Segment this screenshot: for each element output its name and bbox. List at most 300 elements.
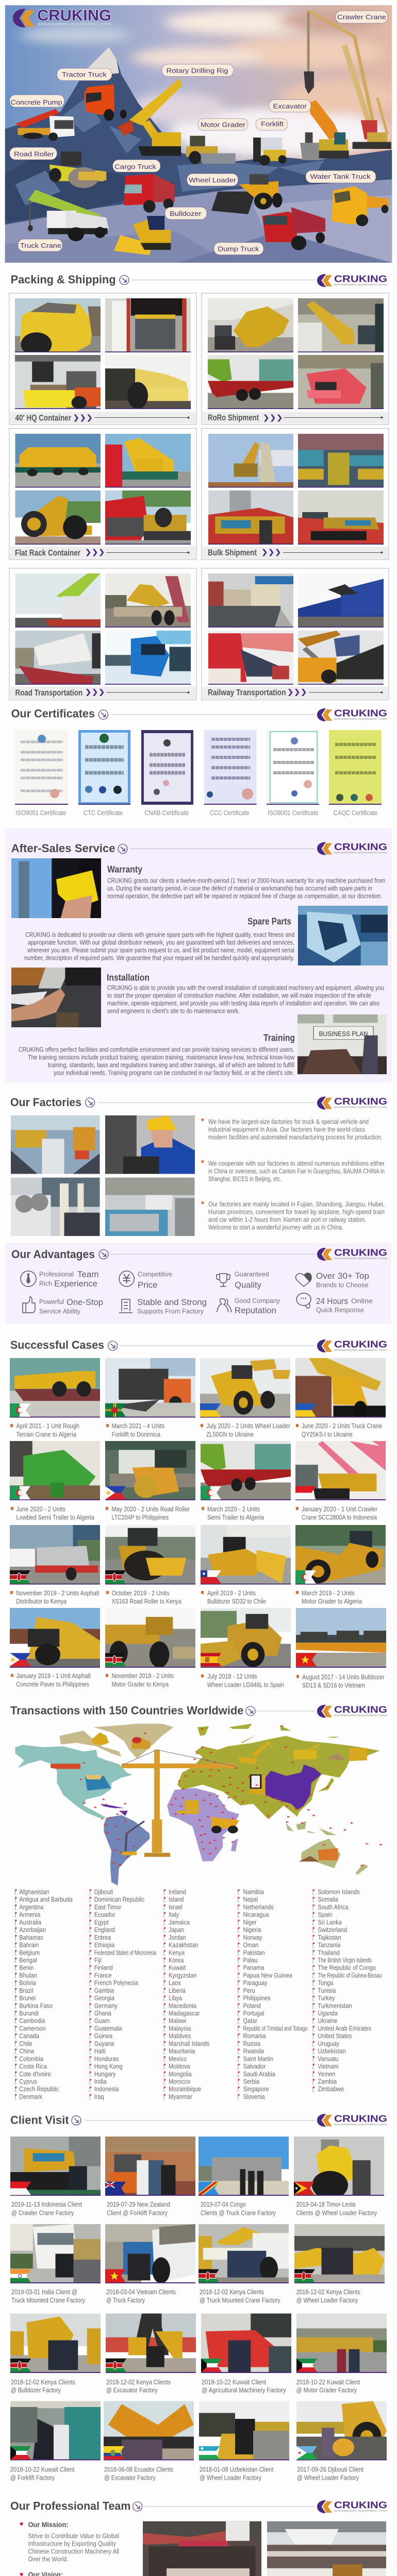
advantage: 24 hours: 24 Hours: [316, 1296, 348, 1306]
country list column 1: Cameroon: [19, 2025, 46, 2032]
photo: forklift lifting roller: [15, 355, 101, 409]
visit caption: Kenya wheel loader: 2018-12-02 Kenya Clients: [296, 2288, 360, 2296]
advantage: brands: Over 30+ Top: [316, 1271, 369, 1281]
country list column 3: Italy: [169, 1911, 179, 1919]
Warranty block: Warranty: [107, 865, 142, 875]
country list column 4: Qatar: [243, 2018, 257, 2025]
visit caption: Kenya truck crane: @ Truck Mounted Crane Factory: [200, 2296, 280, 2304]
country list column 1: Costa Rica: [19, 2063, 47, 2070]
visit: New Zealand: [105, 2137, 195, 2196]
country list column 4: Niger: [243, 1919, 257, 1926]
photo: robot line: [11, 1115, 100, 1174]
bullet 3: and car within 1-2 hours from Xiamen air port or railway station.: [208, 1216, 366, 1223]
country list column 5: Zambia: [318, 2078, 337, 2086]
visit caption: Uzbekistan: @ Wheel Loader Factory: [200, 2474, 261, 2481]
label: Motor Grader: Motor Grader: [201, 121, 246, 129]
country list column 3: Morocco: [169, 2078, 191, 2086]
Spare Parts block: Spare Parts: [247, 916, 291, 926]
photo: roller rear: [15, 298, 101, 352]
label: Bulldozer: Bulldozer: [170, 210, 202, 217]
heading: Packing & Shipping: [11, 273, 388, 287]
visit caption: Kenya excavator: @ Excavator Factory: [106, 2386, 158, 2394]
photo: laptop and hands: [11, 968, 101, 1027]
panel: 40' HQ container: [9, 293, 196, 425]
country list column 2: Egypt: [94, 1919, 109, 1926]
heading: Our Professional Team: Our Professional Team: [10, 2500, 130, 2513]
heading: Transactions with 150 Countries Worldwide: ENGINEERING EQUIPMENT KING: [334, 1714, 388, 1717]
country list column 4: Russia: [243, 2040, 261, 2047]
country list column 2: Hong Kong: [94, 2063, 123, 2070]
visit caption: Vietnam: [106, 2288, 176, 2304]
case caption 15: July 2018 - 12 Units: [207, 1672, 257, 1680]
heading: Transactions with 150 Countries Worldwide: CRUKING: [334, 1704, 387, 1715]
country list column 1: Denmark: [19, 2093, 42, 2100]
country list column 1: Bolivia: [19, 1980, 36, 1987]
section: successful cases: [10, 1338, 388, 1689]
country list column 4: Namibia: [243, 1889, 264, 1896]
country list column 1: Afghanistan: [19, 1889, 49, 1896]
case caption 12: Motor Grader to Algeria: [302, 1597, 362, 1605]
heading: Our Advantages: ENGINEERING EQUIPMENT KING: [334, 1257, 388, 1260]
country list column 4: Oman: [243, 1942, 258, 1949]
case caption 14: November 2018 - 2 Units: [112, 1672, 174, 1680]
certificate: ISO9001 second: ISO9001 Certificate: [268, 809, 318, 817]
photo: crane on flat rack: [15, 434, 101, 487]
visit caption: Indonesia: [11, 2200, 82, 2216]
heading: Our Advantages: Our Advantages: [11, 1248, 95, 1261]
case caption 12: [296, 1589, 362, 1605]
team text: mission: Over the World.: [28, 2555, 68, 2563]
section: advantages: [5, 1243, 391, 1324]
country list column 5: [312, 1888, 382, 2093]
photo: engine: [298, 906, 388, 965]
country list column 5: Vietnam: [318, 2063, 339, 2070]
case: bulldozer: [201, 1525, 291, 1585]
case caption 7: [202, 1505, 264, 1521]
heading: Successful Cases: CRUKING: [334, 1338, 387, 1350]
visit caption: Kenya bulldozer: [11, 2378, 75, 2394]
visit caption: Congo: 2019-07-04 Congo: [201, 2200, 246, 2208]
advantage: 24 hours: Online: [351, 1297, 373, 1304]
advantage: quality: Quality: [235, 1280, 261, 1290]
visit caption: Kuwait grader: [296, 2378, 360, 2394]
country list column 4: Serbia: [243, 2078, 260, 2086]
country list column 3: Madagascar: [169, 2010, 200, 2017]
country list column 5: Uzbekistan: [318, 2048, 346, 2055]
country list column 4: Singapore: [243, 2086, 269, 2093]
country list column 1: [14, 1888, 73, 2100]
advantage: one-stop: Service Ability: [39, 1308, 80, 1315]
advantage: one-stop: [23, 1297, 103, 1315]
case caption 10: October 2019 - 2 Units: [112, 1589, 170, 1597]
heading: Client Visit: [10, 2113, 388, 2127]
case caption 13: January 2019 - 1 Unit Asphalt: [16, 1672, 91, 1680]
country list column 2: Guinea: [94, 2033, 113, 2040]
case caption 11: April 2019 - 2 Units: [207, 1589, 256, 1597]
case: green trailer: [10, 1441, 100, 1500]
country list column 1: Cambodia: [19, 2018, 45, 2025]
caption: Bulk Shipment: [202, 547, 388, 558]
visit caption: Uzbekistan: 2018-01-08 Uzbekistan Client: [200, 2466, 274, 2473]
case caption 6: May 2020 - 2 Units Road Roller: [112, 1505, 190, 1513]
label: Motor Grader: [198, 118, 248, 130]
certificate: CTC: [78, 730, 130, 817]
country list column 2: India: [94, 2078, 107, 2086]
photo: excavator on ship 2: [298, 490, 384, 545]
bullet 1: industrial equipment in Asia. Our factories have the world-class: [208, 1125, 365, 1133]
photo: pink trailers: [298, 355, 384, 409]
country list column 3: Moldova: [169, 2063, 190, 2070]
label: Rotary Drilling Rig: Rotary Drilling Rig: [167, 67, 228, 74]
country list column 3: Laos: [169, 1980, 181, 1987]
country list column 1: Burundi: [19, 2010, 39, 2017]
country list column 5: Turkmenistan: [318, 2003, 352, 2009]
country list column 2: Ecuador: [94, 1911, 115, 1919]
country list column 4: Rwanda: [243, 2048, 264, 2055]
country list column 2: Georgia: [94, 1995, 114, 2002]
visit caption: Vietnam: 2018-03-04 Vietnam Clients: [106, 2288, 176, 2296]
case: padfoot roller: [105, 1525, 195, 1585]
heading: Our Advantages: [11, 1247, 388, 1261]
advantage: reputation: Good Company: [235, 1297, 280, 1304]
visit caption: Djibouti: @ Wheel Loader Factory: [297, 2474, 359, 2481]
Installation block: send engineers to client's site to do maintenance work.: [107, 1008, 240, 1015]
case caption 6: LTC204P to Philippines: [112, 1514, 169, 1521]
country list column 3: Jordan: [169, 1934, 186, 1941]
country list column 2: Guam: [94, 2018, 110, 2025]
certificate: CAQC: CAQC Certificate: [334, 809, 377, 817]
heading: Client Visit: CRUKING: [334, 2113, 387, 2124]
photo: excavator on ship 1: [208, 490, 293, 545]
heading: Transactions with 150 Countries Worldwide: [10, 1704, 388, 1718]
advantage: team: Team: [77, 1269, 99, 1279]
country list column 3: Mozambique: [169, 2086, 201, 2093]
logo: [13, 6, 112, 27]
country list column 2: Gambia: [94, 1987, 114, 1994]
country list column 2: Honduras: [94, 2056, 119, 2063]
caption: Bulk Shipment: Bulk Shipment: [208, 548, 257, 557]
case: asphalt paver: [10, 1608, 100, 1668]
Training block: [19, 1032, 295, 1077]
case: motor grader: [295, 1525, 386, 1585]
visit caption: Kenya truck crane: [200, 2288, 280, 2304]
case caption 1: Terrain Crane to Algeria: [16, 1430, 77, 1438]
heading: After-Sales Service: After-Sales Service: [11, 842, 115, 855]
country list column 5: Switzerland: [318, 1926, 347, 1934]
label: Excavator: Excavator: [273, 102, 307, 110]
visit caption: Timor-Leste: [296, 2200, 377, 2216]
case caption 8: Crane SCC2800A to Indonesia: [302, 1514, 377, 1521]
team text: vision: [20, 2570, 120, 2576]
heading: Our Factories: [10, 1096, 388, 1110]
photo: hold full of excavators: [298, 434, 384, 487]
country list column 1: Bengal: [19, 1957, 37, 1964]
caption: Flat Rack Container: [10, 547, 196, 558]
certificate: CCC: CCC Certificate: [210, 809, 250, 817]
bullet 3: [201, 1200, 385, 1231]
photo: truck crane on trailer: [15, 573, 101, 628]
caption: Railway Transportation: [202, 687, 388, 699]
country list column 3: Macedonia: [169, 2003, 196, 2009]
photo: red low-bed trailer: [208, 355, 293, 409]
case: wheel loaders: [200, 1358, 290, 1418]
Training block: The training sessions include product training, operation training, maintenance know-how, technical know-how: [28, 1054, 295, 1061]
label: Forklift: [256, 118, 288, 130]
bullet 1: We have the largest-size factories for truck & special vehicle and: [208, 1118, 369, 1125]
advantage: brands: Brands to Choose: [316, 1281, 369, 1289]
country list column 5: Spain: [318, 1911, 333, 1919]
country list column 4: Norway: [243, 1934, 262, 1941]
country list column 4: Pakistan: [243, 1950, 265, 1956]
visit caption: New Zealand: 2019-07-29 New Zealand: [107, 2200, 170, 2208]
country list column 3: [163, 1888, 210, 2100]
country list column 2: Iraq: [94, 2093, 104, 2100]
factory bullet list: [201, 1118, 385, 1231]
team text: mission: Strive to Contribute Value to Global: [28, 2532, 119, 2540]
case caption 7: March 2020 - 2 Units: [207, 1505, 260, 1513]
country list column 1: Cote d'Ivoire: [19, 2071, 51, 2078]
country list column 3: Israel: [169, 1904, 183, 1911]
visit caption: Djibouti: 2017-09-26 Djibouti Client: [297, 2466, 363, 2473]
advantage: price: [119, 1270, 172, 1290]
country list column 3: Island: [169, 1896, 184, 1903]
country list column 3: Kenya: [169, 1950, 185, 1956]
country list column 5: Somalia: [318, 1896, 339, 1903]
case caption 2: Forklift to Donimica: [112, 1430, 161, 1438]
bullet 2: [201, 1159, 385, 1183]
team photo: group indoors: [143, 2521, 261, 2576]
country list column 4: Nigeria: [243, 1926, 261, 1934]
label: Crawler Crane: Crawler Crane: [337, 13, 386, 21]
visit caption: Indonesia: @ Crawler Crane Factory: [11, 2209, 74, 2216]
case caption 11: Bulldozer SD32 to Chile: [207, 1597, 266, 1605]
bullet 2: Shanghai, BICES in Beijing, etc.: [208, 1175, 282, 1183]
case caption 5: Lowbed Semi Trailer to Algeria: [16, 1514, 95, 1521]
heading: Successful Cases: ENGINEERING EQUIPMENT KING: [334, 1349, 388, 1351]
case caption 10: XS163 Road Roller to Kenya: [112, 1597, 182, 1605]
case caption 15: Wheel Loader LG946L to Spain: [207, 1681, 284, 1689]
label: Road Roller: Road Roller: [14, 150, 54, 158]
country list column 2: Fiji: [94, 1957, 102, 1964]
Training block: training, standards, laws and regulations training and other trainings, all of which are tailored to fulfill: [48, 1061, 294, 1069]
country list column 2: Haiti: [94, 2048, 106, 2055]
visit caption: Kuwait agricultural: [202, 2378, 286, 2394]
photo: excavator lifted: [208, 434, 293, 487]
country list column 2: Hungary: [94, 2071, 115, 2078]
photo: engine parts: [11, 1178, 100, 1236]
photo: white dump body on truck: [15, 631, 101, 685]
caption: RoRo Shipment: [202, 412, 388, 423]
label: Crawler Crane: [336, 11, 388, 23]
country list column 5: Vanuatu: [318, 2056, 339, 2063]
country list column 2: Ethiopia: [94, 1942, 115, 1949]
bullet 3: Welcome to start a wonderful journey with us in China.: [208, 1223, 343, 1231]
case caption 14: [106, 1672, 174, 1688]
country list column 3: Mexico: [169, 2056, 187, 2063]
case caption 8: January 2020 - 1 Unit Crawler: [302, 1505, 378, 1513]
world map: [15, 1724, 383, 1886]
hero scene: [5, 5, 392, 263]
Training block: your individual needs. Training programs can be conducted in our factory field, or at the client's site.: [54, 1070, 294, 1077]
certificate: ISO9001 second: [267, 730, 319, 817]
country list column 5: The Republic of Guinea-Bissau: [318, 1972, 382, 1979]
country list column 4: Portugal: [243, 2010, 264, 2017]
advantage: price: Competitive: [138, 1270, 172, 1278]
country list column 2: East Timor: [94, 1904, 121, 1911]
country list column 1: China: [19, 2048, 34, 2055]
case caption 9: [10, 1589, 100, 1605]
heading: Client Visit: ENGINEERING EQUIPMENT KING: [334, 2123, 388, 2126]
visit caption: Timor-Leste: Clients @ Wheel Loader Factory: [296, 2209, 377, 2216]
heading: Our Certificates: Our Certificates: [11, 707, 95, 720]
country list column 5: Turkey: [318, 1995, 335, 2002]
section: factories: [10, 1096, 388, 1236]
advantage: quality: Guaranteed: [235, 1270, 269, 1278]
photo: blue containers: [298, 579, 384, 628]
country list column 5: Solomon Islands: [318, 1889, 360, 1896]
case: semi trailer: [201, 1441, 291, 1500]
label: Water Tank Truck: [306, 171, 376, 183]
case: crawler crane: [295, 1441, 386, 1500]
photo: reach stacker loading wagon: [298, 631, 384, 685]
case caption 11: [201, 1589, 266, 1605]
visit caption: Kuwait grader: 2018-10-22 Kuwait Client: [296, 2378, 360, 2386]
caption: 40' HQ Container: 40′ HQ Container: [15, 413, 71, 422]
visit: Kuwait forklift: [10, 2401, 101, 2461]
country list column 1: Australia: [19, 1919, 41, 1926]
country list column 5: United Arab Emirates: [318, 2025, 371, 2032]
label: Forklift: Forklift: [261, 120, 284, 128]
advantage: 24 hours: [296, 1293, 373, 1314]
advantage: team: Professional: [39, 1270, 74, 1278]
label: Dump Truck: Dump Truck: [218, 245, 259, 252]
case caption 4: QY25K5-I to Ukraine: [302, 1430, 353, 1438]
country list column 2: Dominican Republic: [94, 1896, 145, 1903]
photo: roller on low bed: [15, 490, 101, 545]
team text: mission: Our Mission:: [28, 2520, 68, 2529]
heading: After-Sales Service: CRUKING: [334, 841, 387, 852]
visit caption: Kenya bulldozer: 2018-12-02 Kenya Clients: [11, 2378, 75, 2386]
country list column 4: Paraguay: [243, 1980, 268, 1987]
country list column 5: Tonga: [318, 1980, 334, 1987]
panel: railway transportation: [202, 568, 389, 700]
country list column 5: United States: [318, 2033, 352, 2040]
country list column 3: Libya: [169, 1995, 183, 2002]
panel: flat rack container: [9, 429, 196, 560]
visit: Congo: [197, 2137, 289, 2197]
country list column 1: Colombia: [19, 2056, 43, 2063]
country list column 2: Finland: [94, 1964, 113, 1972]
case: bulldozer fleet: [296, 1608, 386, 1668]
country list column 1: Chile: [19, 2040, 32, 2047]
case caption 6: [106, 1505, 190, 1521]
case: road roller: [105, 1441, 195, 1500]
heading: Our Factories: CRUKING: [334, 1096, 387, 1107]
country list column 1: Brunei: [19, 1995, 36, 2002]
case caption 7: Semi Trailer to Algeria: [207, 1514, 264, 1521]
visit caption: Kuwait agricultural: 2018-10-22 Kuwait Client: [202, 2378, 266, 2386]
country list column 2: Indonesia: [94, 2086, 119, 2093]
visit: Ecuador: [104, 2401, 194, 2461]
logo: CRUKING: [37, 6, 111, 24]
country list column 4: Nepal: [243, 1896, 258, 1903]
country list column 5: The Republic of Congo: [318, 1964, 376, 1972]
country list column 4: Romania: [243, 2033, 266, 2040]
photo: roller at container door: [105, 355, 191, 409]
country list column 4: Republic of Trinidad and Tobago: [243, 2025, 308, 2032]
country list column 5: Ukraine: [318, 2018, 338, 2025]
country list column 4: Salvador: [243, 2063, 266, 2070]
visit caption: Indonesia: 2019-11-13 Indonesia Client: [11, 2200, 82, 2208]
team photo: table: [267, 2521, 386, 2576]
Training block: Training: [263, 1032, 295, 1043]
Warranty block: [107, 865, 385, 900]
visit caption: Kuwait grader: @ Motor Grader Factory: [296, 2386, 357, 2394]
country list column 1: Benin: [19, 1964, 34, 1972]
country list column 2: Guatemala: [94, 2025, 122, 2032]
case caption 2: March 2021 - 4 Units: [112, 1422, 164, 1430]
heading: Successful Cases: [10, 1338, 388, 1352]
country list column 4: Saudi Arabia: [243, 2071, 275, 2078]
panel background: [5, 828, 392, 1082]
section: client visit: [10, 2113, 388, 2481]
country list column 3: Liberia: [169, 1987, 186, 1994]
case: graders: [105, 1608, 195, 1668]
country list column 1: Bahrain: [19, 1942, 39, 1949]
Spare Parts block: CRUKING is dedicated to provide our clients with genuine spare parts with the highest quality, exact fitness and: [25, 931, 294, 939]
section: transactions worldwide: [10, 1704, 388, 2100]
certificate: ISO9001: ISO9001 Certificate: [15, 809, 67, 817]
country list column 4: Palau: [243, 1957, 258, 1964]
heading: Our Professional Team: CRUKING: [334, 2500, 387, 2510]
case: wheel loader to Spain: [201, 1608, 291, 1668]
photo: hard hat: [11, 858, 101, 918]
case caption 13: Concrete Paver to Philippines: [16, 1681, 89, 1688]
country list column 5: Tunisia: [318, 1987, 336, 1994]
country list column 3: Mauritania: [169, 2048, 195, 2055]
Spare Parts block: [24, 916, 294, 961]
country list column 5: Uganda: [318, 2010, 338, 2017]
label: Cargo Truck: Cargo Truck: [114, 163, 157, 171]
advantage: team: Rich: [39, 1280, 52, 1287]
country list column 1: Armenia: [19, 1911, 41, 1919]
case caption 14: Motor Grader to Kenya: [112, 1681, 169, 1688]
country list column 4: Poland: [243, 2003, 261, 2009]
advantage: 24 hours: Quick Response: [316, 1306, 364, 1314]
case: rough terrain crane: [10, 1358, 100, 1418]
advantage: stable support: [119, 1297, 207, 1315]
visit caption: India: 2019-03-01 India Client @: [11, 2288, 77, 2296]
section: packing and shipping: [9, 273, 389, 700]
case caption 9: November 2019 - 2 Units Asphalt: [16, 1589, 100, 1597]
country list column 4: Netherlands: [243, 1904, 274, 1911]
country list column 1: Bahamas: [19, 1934, 43, 1941]
visit: Djibouti: [296, 2401, 387, 2461]
country list column 2: Federated States of Micronesia: [94, 1950, 157, 1956]
country list column 4: Slovenia: [243, 2093, 265, 2100]
country list column 4: Saint Martin: [243, 2056, 273, 2063]
country list column 1: Belgium: [19, 1950, 40, 1956]
visit caption: Uzbekistan: [200, 2466, 274, 2481]
photo: blue rack: [105, 1178, 195, 1236]
country list column 3: Malaysia: [169, 2025, 191, 2032]
caption: Flat Rack Container: Flat Rack Container: [15, 548, 80, 557]
case caption 10: [106, 1589, 182, 1605]
section: certificates: [11, 707, 388, 817]
visit: Kuwait agricultural: [201, 2313, 291, 2373]
visit caption: Ecuador: 2018-06-08 Ecuador Clients: [104, 2466, 173, 2473]
country list column 4: Philippines: [243, 1995, 271, 2002]
